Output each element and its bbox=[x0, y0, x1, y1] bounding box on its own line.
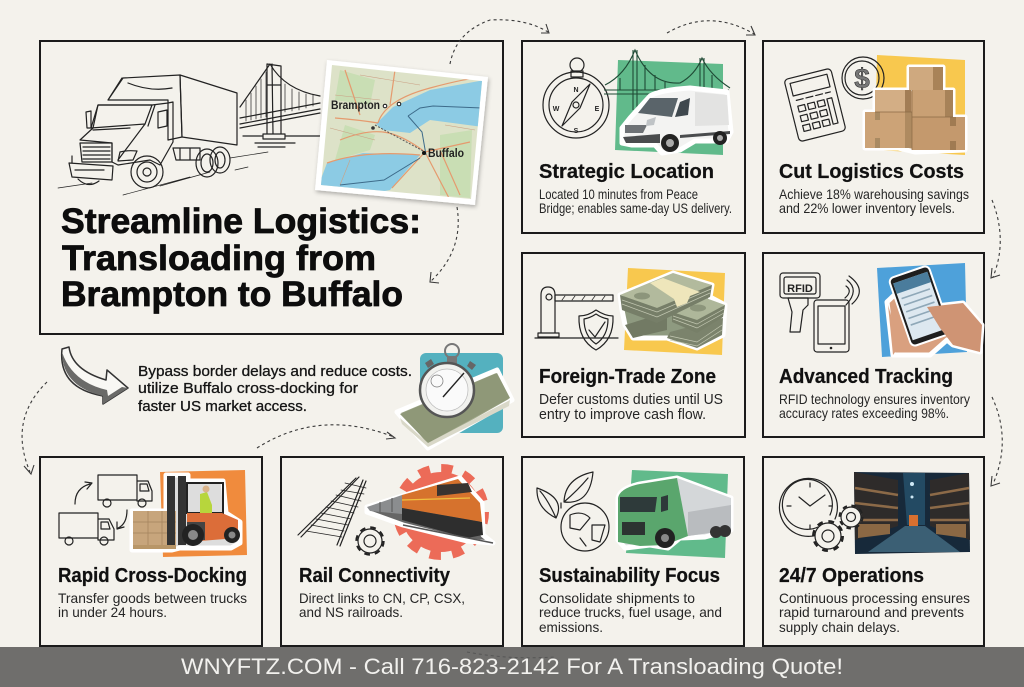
icon: green bridge bbox=[604, 50, 730, 110]
heading: Foreign-Trade Zone bbox=[539, 365, 716, 388]
arrow: callout to rapid cross-docking bbox=[22, 382, 47, 474]
callout text line 3: faster US market access. bbox=[138, 398, 307, 415]
icon: red gear bbox=[398, 469, 484, 555]
colour block: yellow bbox=[624, 268, 725, 355]
body text line 2: and NS railroads. bbox=[299, 604, 403, 620]
body text: Transfer goods between trucks bbox=[58, 590, 247, 606]
heading: Cut Logistics Costs bbox=[779, 160, 964, 183]
illustration: suspension bridge line drawing bbox=[240, 64, 320, 147]
body text line 2: reduce trucks, fuel usage, and bbox=[539, 604, 722, 620]
icon: wall clock bbox=[779, 478, 837, 536]
title bbox=[61, 201, 421, 314]
icon: compass: W bbox=[553, 106, 560, 113]
colour block: orange bbox=[160, 470, 247, 557]
body text line 2: in under 24 hours. bbox=[58, 604, 167, 620]
icon: railway tracks bbox=[298, 477, 366, 546]
icon: dollar coin: $ bbox=[854, 63, 870, 94]
body text: Defer customs duties until US bbox=[539, 391, 723, 408]
body text line 3: emissions. bbox=[539, 619, 603, 635]
arrow: hero to strategic location bbox=[450, 20, 549, 64]
panel: foreign-trade zone bbox=[522, 253, 745, 437]
icon: calculator bbox=[784, 68, 846, 142]
arrow: map to hero title bbox=[430, 207, 458, 283]
icon: boom barrier and shield bbox=[535, 287, 618, 350]
image: forklift with pallet bbox=[132, 475, 240, 550]
colour block: yellow bbox=[875, 55, 965, 155]
callout bbox=[62, 344, 512, 448]
panel: hero bbox=[40, 41, 503, 334]
icon: gears bbox=[815, 507, 861, 549]
icon: compass: S bbox=[574, 128, 579, 135]
icon: small gear bbox=[358, 529, 382, 553]
title: Transloading from bbox=[62, 238, 376, 278]
icon: sketched curved arrow bbox=[62, 347, 128, 404]
colour block: green bbox=[615, 60, 723, 155]
arrow: cut costs to tracking bbox=[991, 200, 1000, 278]
body text: RFID technology ensures inventory bbox=[779, 391, 970, 407]
panel: advanced tracking bbox=[763, 253, 984, 437]
panel: strategic location bbox=[522, 41, 745, 233]
image: cardboard boxes bbox=[865, 67, 965, 152]
heading: Rapid Cross-Docking bbox=[58, 564, 247, 587]
body text line 2: and 22% lower inventory levels. bbox=[779, 200, 955, 216]
illustration: map of Brampton to Buffalo bbox=[310, 55, 490, 205]
icon: compass: E bbox=[595, 106, 600, 113]
heading: 24/7 Operations bbox=[779, 564, 924, 587]
icon: compass bbox=[543, 58, 609, 138]
arrow: strategic location to cut costs bbox=[667, 21, 755, 35]
panel: 24/7 operations bbox=[763, 457, 984, 646]
heading: Strategic Location bbox=[539, 160, 714, 183]
body text: Direct links to CN, CP, CSX, bbox=[299, 590, 465, 606]
icon: RFID scanner and tablet: RFID bbox=[787, 283, 813, 295]
map label: Brampton: Brampton bbox=[331, 98, 380, 112]
icon: globe with leaves bbox=[537, 472, 609, 551]
heading: Rail Connectivity bbox=[299, 564, 451, 587]
footer text: WNYFTZ.COM - Call 716-823-2142 For A Transloading Quote! bbox=[181, 654, 843, 679]
body text line 2: rapid turnaround and prevents bbox=[779, 604, 964, 620]
image: hand holding phone bbox=[887, 265, 982, 355]
image: white van bbox=[622, 88, 731, 153]
heading: Sustainability Focus bbox=[539, 564, 720, 587]
image: stacks of cash bbox=[620, 273, 725, 348]
icon: stopwatch bbox=[420, 344, 476, 417]
callout text line 2: utilize Buffalo cross-docking for bbox=[138, 380, 358, 397]
panel: cut logistics costs bbox=[763, 41, 984, 233]
icon: dollar coin bbox=[842, 57, 884, 99]
image: green semi truck bbox=[618, 478, 731, 548]
icon: compass: N bbox=[573, 87, 579, 94]
icon: exchanging delivery trucks bbox=[59, 475, 152, 545]
icon: RFID scanner and tablet bbox=[780, 273, 859, 352]
arrow: cross-docking to rail bbox=[257, 425, 395, 448]
body text line 2: entry to improve cash flow. bbox=[539, 406, 706, 423]
image: cash under stopwatch bbox=[397, 370, 512, 448]
panel: rail connectivity bbox=[281, 457, 503, 646]
footer banner bbox=[0, 647, 1024, 687]
illustration: box truck line drawing bbox=[58, 75, 268, 195]
body text line 2: accuracy rates exceeding 98%. bbox=[779, 405, 949, 421]
body text: Continuous processing ensures bbox=[779, 590, 970, 606]
callout text: Bypass border delays and reduce costs. bbox=[138, 363, 412, 380]
title: Streamline Logistics: bbox=[61, 201, 421, 241]
arrow: tracking to operations bbox=[991, 397, 1002, 486]
colour block: blue bbox=[877, 263, 967, 357]
image: orange locomotive bbox=[367, 478, 493, 543]
panel: sustainability focus bbox=[522, 457, 744, 646]
image: warehouse interior bbox=[854, 472, 970, 554]
body text line 3: supply chain delays. bbox=[779, 619, 900, 635]
map label: Buffalo: Buffalo bbox=[428, 146, 464, 160]
heading: Advanced Tracking bbox=[779, 365, 953, 388]
body text line 2: Bridge; enables same-day US delivery. bbox=[539, 200, 732, 216]
body text: Consolidate shipments to bbox=[539, 590, 695, 606]
body text: Achieve 18% warehousing savings bbox=[779, 186, 969, 202]
colour block: green bbox=[626, 470, 728, 558]
colour block: teal bbox=[420, 353, 503, 433]
title: Brampton to Buffalo bbox=[61, 274, 403, 314]
body text: Located 10 minutes from Peace bbox=[539, 186, 698, 202]
panel: rapid cross-docking bbox=[40, 457, 262, 646]
